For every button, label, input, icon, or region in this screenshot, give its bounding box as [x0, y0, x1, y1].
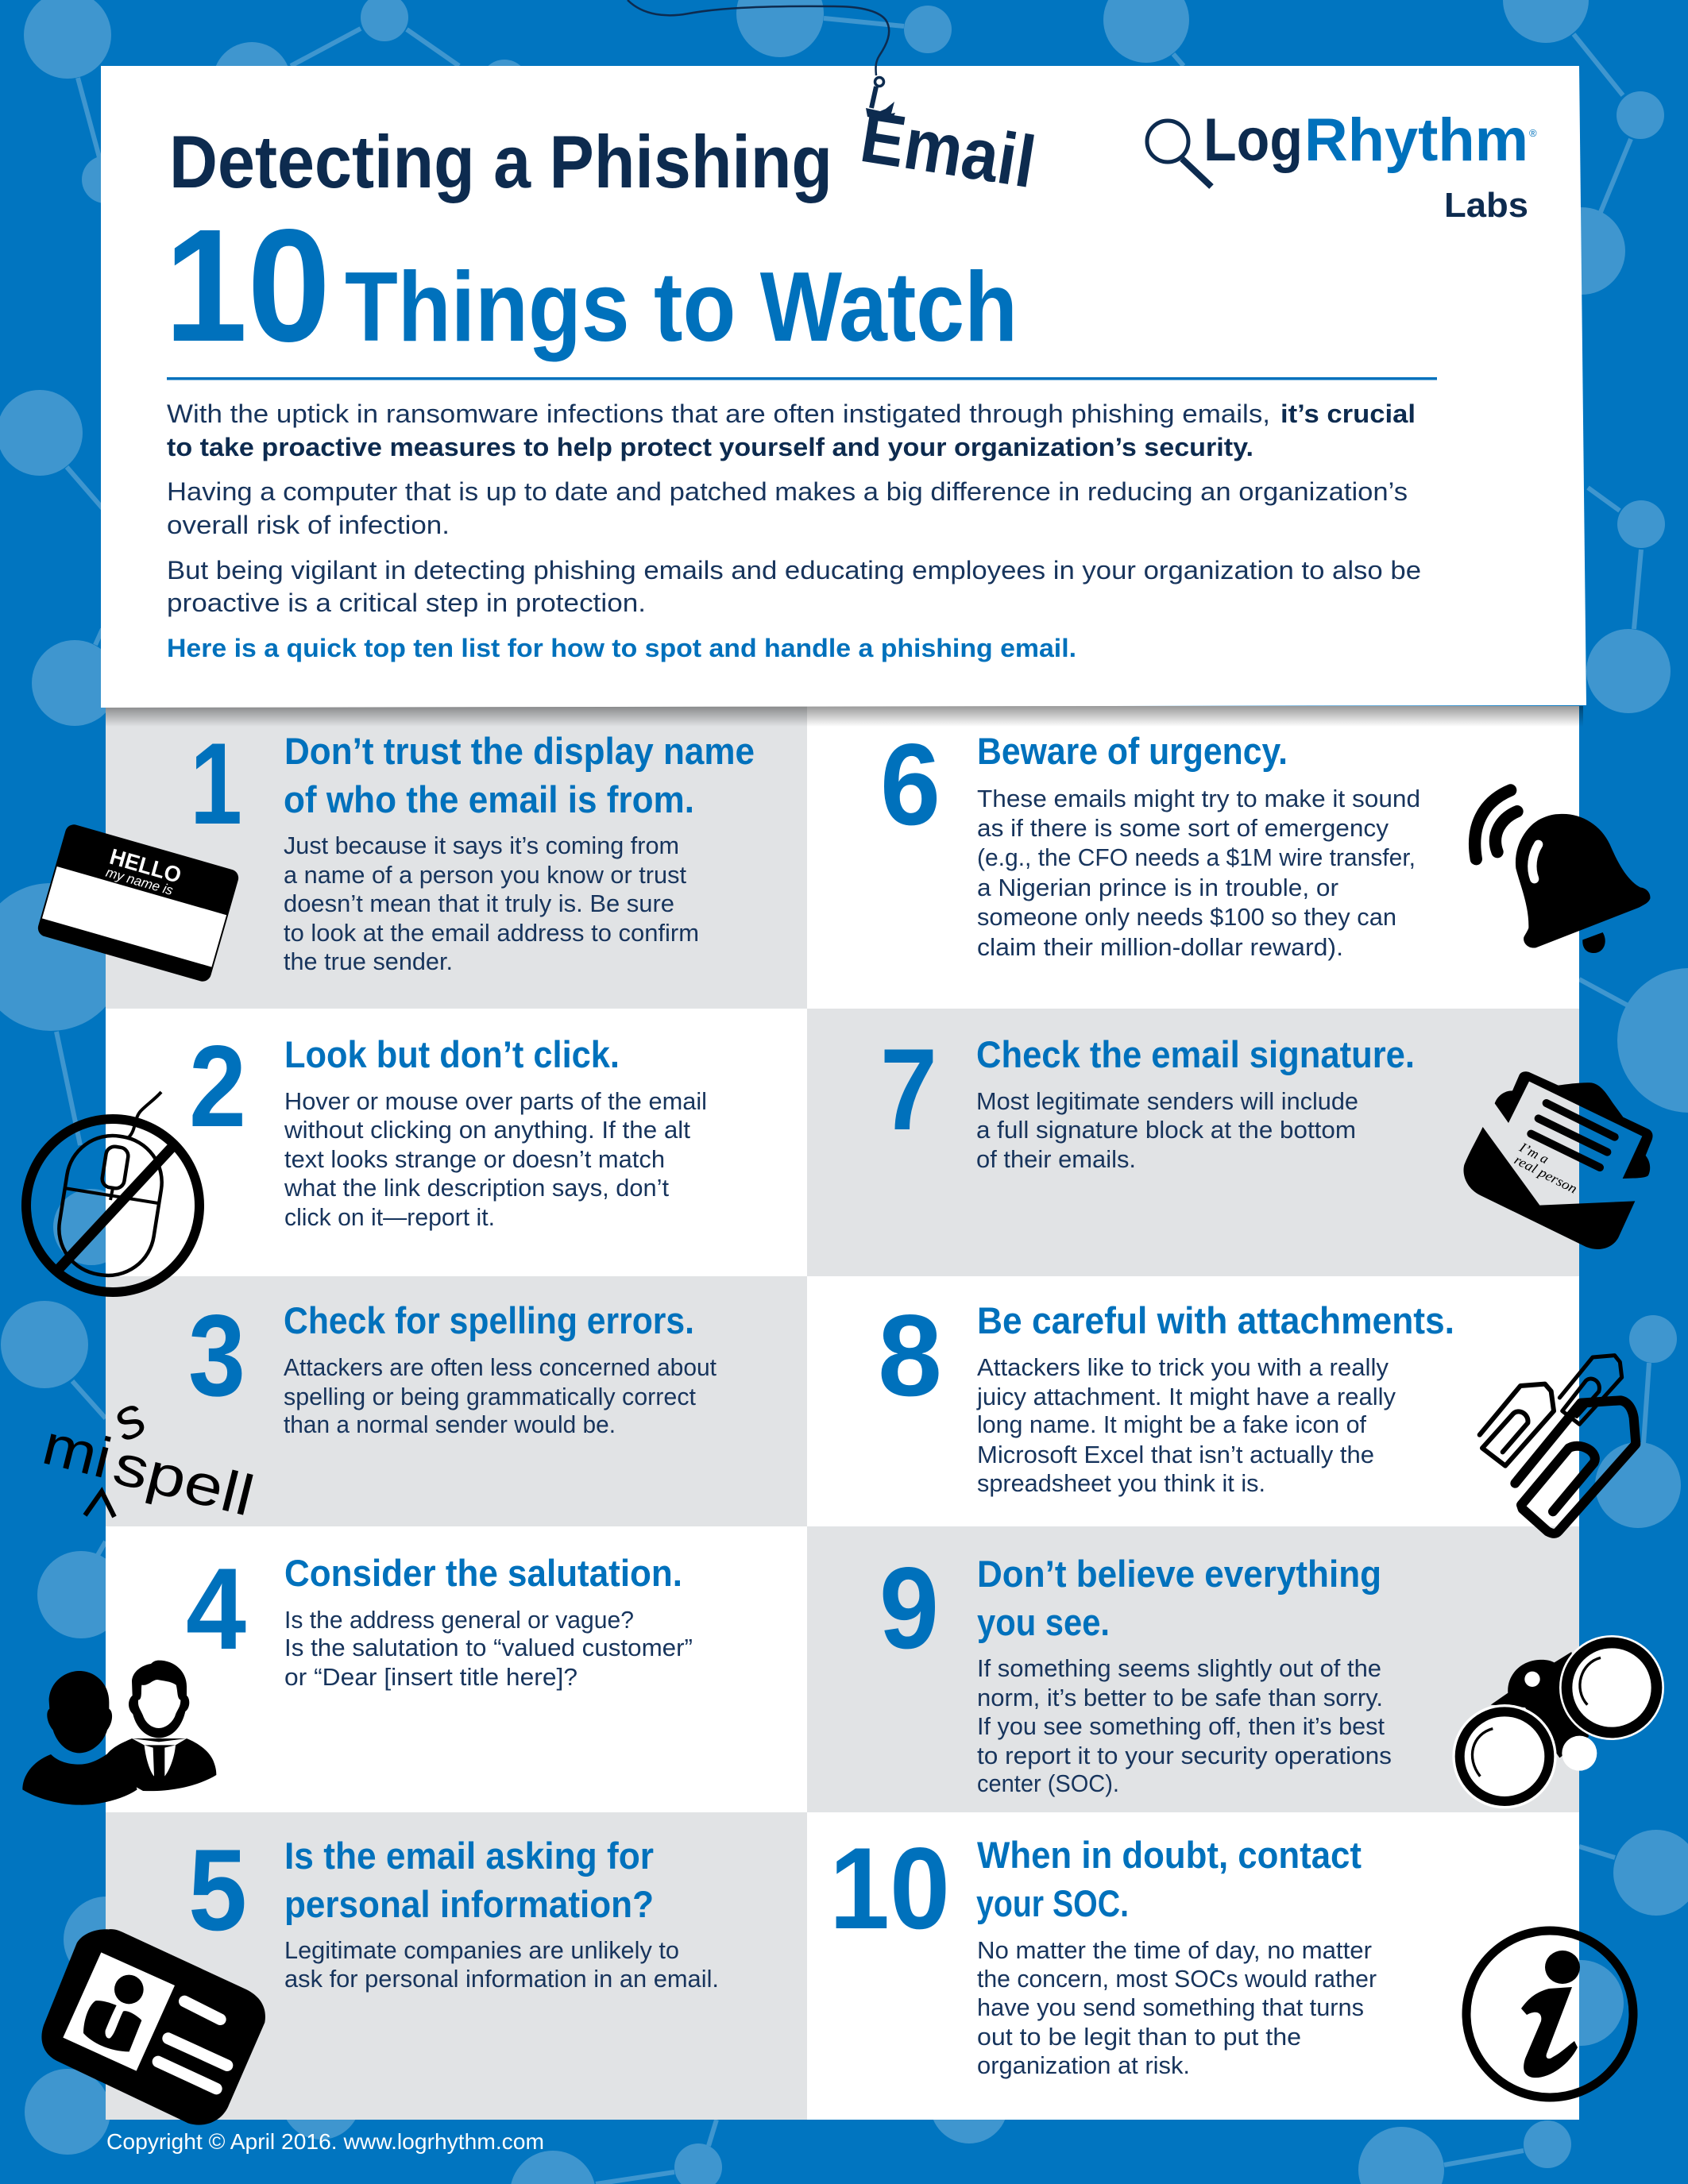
body text 6: These emails might try to make it sound [977, 785, 1420, 812]
body text 10: organization at risk. [977, 2051, 1190, 2079]
body text 4: Is the address general or vague? [284, 1606, 634, 1634]
number 3: 3 [188, 1291, 245, 1420]
intro text [167, 399, 1421, 662]
number 6: 6 [880, 720, 941, 849]
panel: step 1 [106, 706, 807, 1009]
headline: 10 Things to Watch [164, 195, 1018, 375]
body text 1: the true sender. [284, 947, 453, 975]
body text 6: claim their million-dollar reward). [977, 933, 1343, 961]
headline: 10 Things to Watch: 10 [164, 195, 330, 375]
body text 7: Most legitimate senders will include [976, 1087, 1358, 1115]
logo: LogRhythm Labs: Labs [1444, 186, 1528, 225]
body text 10 [977, 1936, 1377, 2079]
heading 7: Check the email signature. [976, 1033, 1415, 1075]
icon: information circle [1466, 1931, 1633, 2097]
intro text: it’s crucial [1280, 399, 1416, 428]
body text 3: spelling or being grammatically correct [284, 1383, 696, 1410]
body text 6: (e.g., the CFO needs a $1M wire transfer, [977, 843, 1416, 871]
body text 6 [977, 785, 1420, 961]
icon: two people [22, 1661, 216, 1805]
intro text: overall risk of infection. [167, 511, 450, 539]
heading 4: Consider the salutation. [284, 1552, 682, 1594]
header shadow [106, 706, 1583, 727]
body text 5: ask for personal information in an email. [284, 1965, 719, 1993]
body text 7 [976, 1087, 1358, 1173]
logo: LogRhythm Labs: ® [1529, 127, 1537, 139]
heading 3: Check for spelling errors. [284, 1299, 694, 1341]
icon: ID card [41, 1929, 265, 2125]
intro text: Here is a quick top ten list for how to spot and handle a phishing email. [167, 634, 1076, 662]
title: Detecting a Phishing: Detecting a Phishing [169, 120, 832, 203]
heading 1 [284, 730, 755, 820]
body text 5: Legitimate companies are unlikely to [284, 1936, 679, 1964]
body text 9: If something seems slightly out of the [977, 1654, 1381, 1682]
panel: step 10 [807, 1812, 1579, 2120]
icon: hello name tag: HELLO [107, 844, 184, 888]
headline: 10 Things to Watch: Things to Watch [345, 253, 1018, 362]
icon: mouse with no-click sign [26, 1092, 199, 1292]
icon: envelope with signed letter [1463, 1071, 1653, 1249]
body text 10: the concern, most SOCs would rather [977, 1965, 1377, 1993]
body text 8 [976, 1353, 1396, 1497]
heading 5 [284, 1835, 654, 1925]
body text 7: of their emails. [976, 1145, 1136, 1173]
body text 4 [284, 1606, 693, 1691]
heading 9: Don’t believe everything [977, 1553, 1381, 1595]
icon: paper clips [1480, 1356, 1636, 1534]
panel: header card [101, 66, 1586, 708]
number 9: 9 [879, 1543, 939, 1673]
body text 1: Just because it says it’s coming from [284, 832, 679, 859]
heading 1: of who the email is from. [284, 778, 694, 820]
body text 8: long name. It might be a fake icon of [977, 1410, 1366, 1438]
logo: LogRhythm Labs: Rhythm [1304, 106, 1528, 174]
heading 9: you see. [977, 1601, 1110, 1643]
logo: LogRhythm Labs: Log [1203, 106, 1303, 174]
body text 10: have you send something that turns [977, 1993, 1364, 2021]
panel: step 4 [106, 1526, 807, 1812]
number 4: 4 [186, 1544, 246, 1673]
body text 2: Hover or mouse over parts of the email [284, 1087, 707, 1115]
intro text: But being vigilant in detecting phishing emails and educating employees in your organization to also be [167, 556, 1421, 585]
body text 1: to look at the email address to confirm [284, 919, 699, 947]
icon: ringing bell [1475, 790, 1650, 953]
body text 3: than a normal sender would be. [284, 1410, 616, 1438]
body text 2: without clicking on anything. If the alt [284, 1116, 690, 1144]
heading 8: Be careful with attachments. [977, 1299, 1454, 1341]
panel: step 9 [807, 1526, 1579, 1812]
footer copyright: Copyright © April 2016. www.logrhythm.com [106, 2129, 544, 2154]
icon: envelope with signed letter: real person [1512, 1152, 1579, 1197]
title word: Email on hook: Email [856, 96, 1041, 203]
icon: fishing line and hook [628, 0, 895, 120]
body text 2 [284, 1087, 707, 1231]
body text 8: Microsoft Excel that isn’t actually the [977, 1441, 1374, 1468]
body text 4: Is the salutation to “valued customer” [284, 1634, 693, 1661]
body text 1: a name of a person you know or trust [284, 861, 686, 889]
heading 1: Don’t trust the display name [284, 730, 755, 772]
heading 9 [977, 1553, 1381, 1643]
heading 5: Is the email asking for [284, 1835, 654, 1877]
number 2: 2 [189, 1021, 246, 1151]
icon: misspell with caret: spell [107, 1433, 260, 1529]
panel: step 7 [807, 1009, 1579, 1276]
body text 2: click on it—report it. [284, 1203, 495, 1231]
body text 2: what the link description says, don’t [284, 1174, 669, 1202]
icon: hello name tag [36, 823, 241, 983]
body text 6: as if there is some sort of emergency [977, 814, 1389, 842]
body text 9: to report it to your security operations [977, 1742, 1392, 1769]
logo: LogRhythm Labs [1147, 106, 1537, 225]
icon: envelope with signed letter: I’m a [1516, 1139, 1551, 1167]
body text 1 [284, 832, 699, 975]
body text 6: someone only needs $100 so they can [977, 903, 1396, 931]
panel: step 5 [106, 1812, 807, 2120]
number 10: 10 [829, 1823, 950, 1953]
body text 4: or “Dear [insert title here]? [284, 1663, 577, 1691]
panel: step 8 [807, 1276, 1579, 1526]
number 8: 8 [878, 1291, 942, 1420]
body text 2: text looks strange or doesn’t match [284, 1145, 665, 1173]
icon: misspell with caret: s [102, 1384, 155, 1454]
body text 10: No matter the time of day, no matter [977, 1936, 1372, 1964]
icon: misspell with caret [37, 1384, 260, 1529]
heading 10: your SOC. [976, 1882, 1129, 1924]
heading 5: personal information? [284, 1883, 654, 1925]
body text 5 [284, 1936, 719, 1993]
intro text: proactive is a critical step in protection. [167, 588, 646, 617]
icon: binoculars [1452, 1635, 1664, 1808]
heading 10 [976, 1834, 1362, 1924]
body text 7: a full signature block at the bottom [976, 1116, 1356, 1144]
body text 8: spreadsheet you think it is. [977, 1469, 1265, 1497]
heading 6: Beware of urgency. [977, 730, 1288, 772]
panel: step 3 [106, 1276, 807, 1526]
body text 9 [977, 1654, 1392, 1797]
body text 9: center (SOC). [977, 1769, 1119, 1797]
body text 10: out to be legit than to put the [977, 2023, 1301, 2051]
number 1: 1 [190, 719, 242, 848]
body text 9: If you see something off, then it’s best [977, 1712, 1385, 1740]
body text 8: Attackers like to trick you with a really [977, 1353, 1389, 1381]
intro text: to take proactive measures to help protect yourself and your organization’s security. [167, 433, 1253, 461]
body text 6: a Nigerian prince is in trouble, or [977, 874, 1338, 901]
heading 2: Look but don’t click. [284, 1033, 620, 1075]
number 7: 7 [880, 1024, 937, 1154]
body text 1: doesn’t mean that it truly is. Be sure [284, 889, 674, 917]
icon: hello name tag: my name is [104, 865, 175, 898]
heading 10: When in doubt, contact [977, 1834, 1362, 1876]
intro text: Having a computer that is up to date and patched makes a big difference in reducing an organization’s [167, 477, 1408, 506]
panel: step 6 [807, 706, 1579, 1009]
body text 9: norm, it’s better to be safe than sorry. [977, 1684, 1383, 1711]
body text 3 [284, 1353, 717, 1438]
body text 8: juicy attachment. It might have a really [976, 1383, 1396, 1410]
number 5: 5 [188, 1825, 247, 1954]
panel: step 2 [106, 1009, 807, 1276]
icon: misspell with caret: mi [37, 1413, 118, 1491]
intro text: With the uptick in ransomware infections that are often instigated through phishing emails, [167, 399, 1270, 428]
body text 3: Attackers are often less concerned about [284, 1353, 717, 1381]
